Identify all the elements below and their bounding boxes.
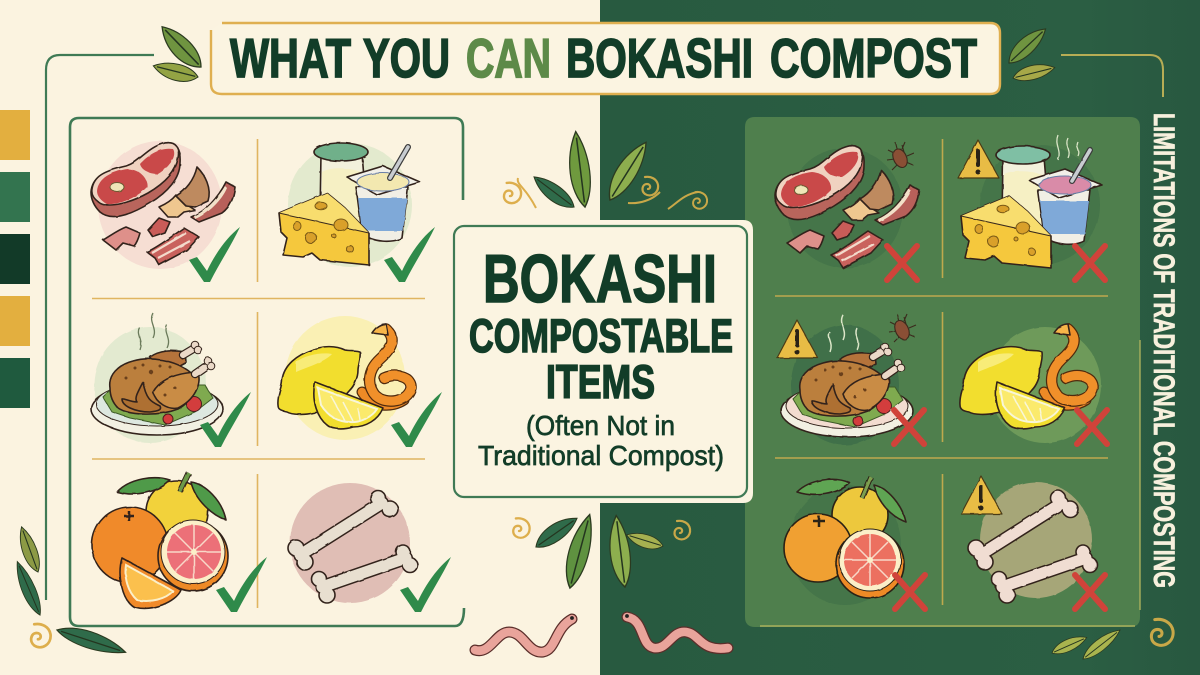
right outer bracket	[1061, 55, 1163, 97]
title text: YOU	[363, 27, 450, 89]
title text: BOKASHI	[566, 27, 753, 89]
panel: limitations of traditional composting	[745, 117, 1140, 627]
icon: citrus fruit	[92, 473, 228, 608]
icon: meat	[91, 141, 235, 269]
background: right green half	[600, 0, 1200, 675]
icon: bones with warning	[961, 476, 1098, 603]
centre heading: ITEMS	[546, 355, 655, 408]
icon: lemon and peel	[278, 316, 411, 440]
left outer bracket	[46, 55, 154, 600]
centre card	[454, 220, 753, 503]
icon: dairy with warning	[958, 135, 1102, 268]
icon: worm left	[475, 617, 573, 652]
centre subtitle: Traditional Compost)	[478, 440, 724, 471]
panel: compostable items	[70, 118, 464, 626]
icon: chicken with warning and pest	[777, 314, 916, 445]
icon: cooked chicken	[91, 313, 223, 443]
icon: lemon and peel on green	[960, 324, 1101, 443]
title text: COMPOST	[770, 27, 977, 89]
leaves beside title, right	[1003, 22, 1056, 84]
title text: CAN	[466, 27, 551, 89]
centre subtitle	[478, 410, 724, 471]
decoration: centre-bottom right leaves	[606, 514, 690, 588]
decoration: bottom right leaves	[1049, 619, 1173, 663]
title text: WHAT	[230, 27, 351, 89]
icon: dairy	[279, 143, 420, 267]
colour swatches	[0, 110, 30, 408]
title banner	[211, 23, 1000, 94]
background: left cream half	[0, 0, 600, 675]
centre heading	[469, 241, 733, 408]
leaves beside title, left	[151, 20, 207, 86]
icon: worm right	[626, 615, 728, 649]
decoration: centre-bottom left leaves	[513, 511, 598, 590]
icon: check marks	[189, 227, 451, 612]
decoration: centre-top left leaves	[504, 130, 594, 214]
decoration: bottom left leaves	[11, 525, 128, 659]
centre heading: COMPOSTABLE	[469, 309, 733, 362]
centre subtitle: (Often Not in	[526, 410, 675, 441]
icon: citrus fruit on green	[784, 477, 906, 605]
decoration: centre-top right leaf	[601, 137, 707, 209]
icon: red cross marks	[887, 246, 1107, 609]
title text	[230, 27, 977, 89]
icon: meat with pest	[775, 142, 919, 268]
centre heading: BOKASHI	[483, 241, 717, 317]
icon: bones	[288, 483, 418, 603]
